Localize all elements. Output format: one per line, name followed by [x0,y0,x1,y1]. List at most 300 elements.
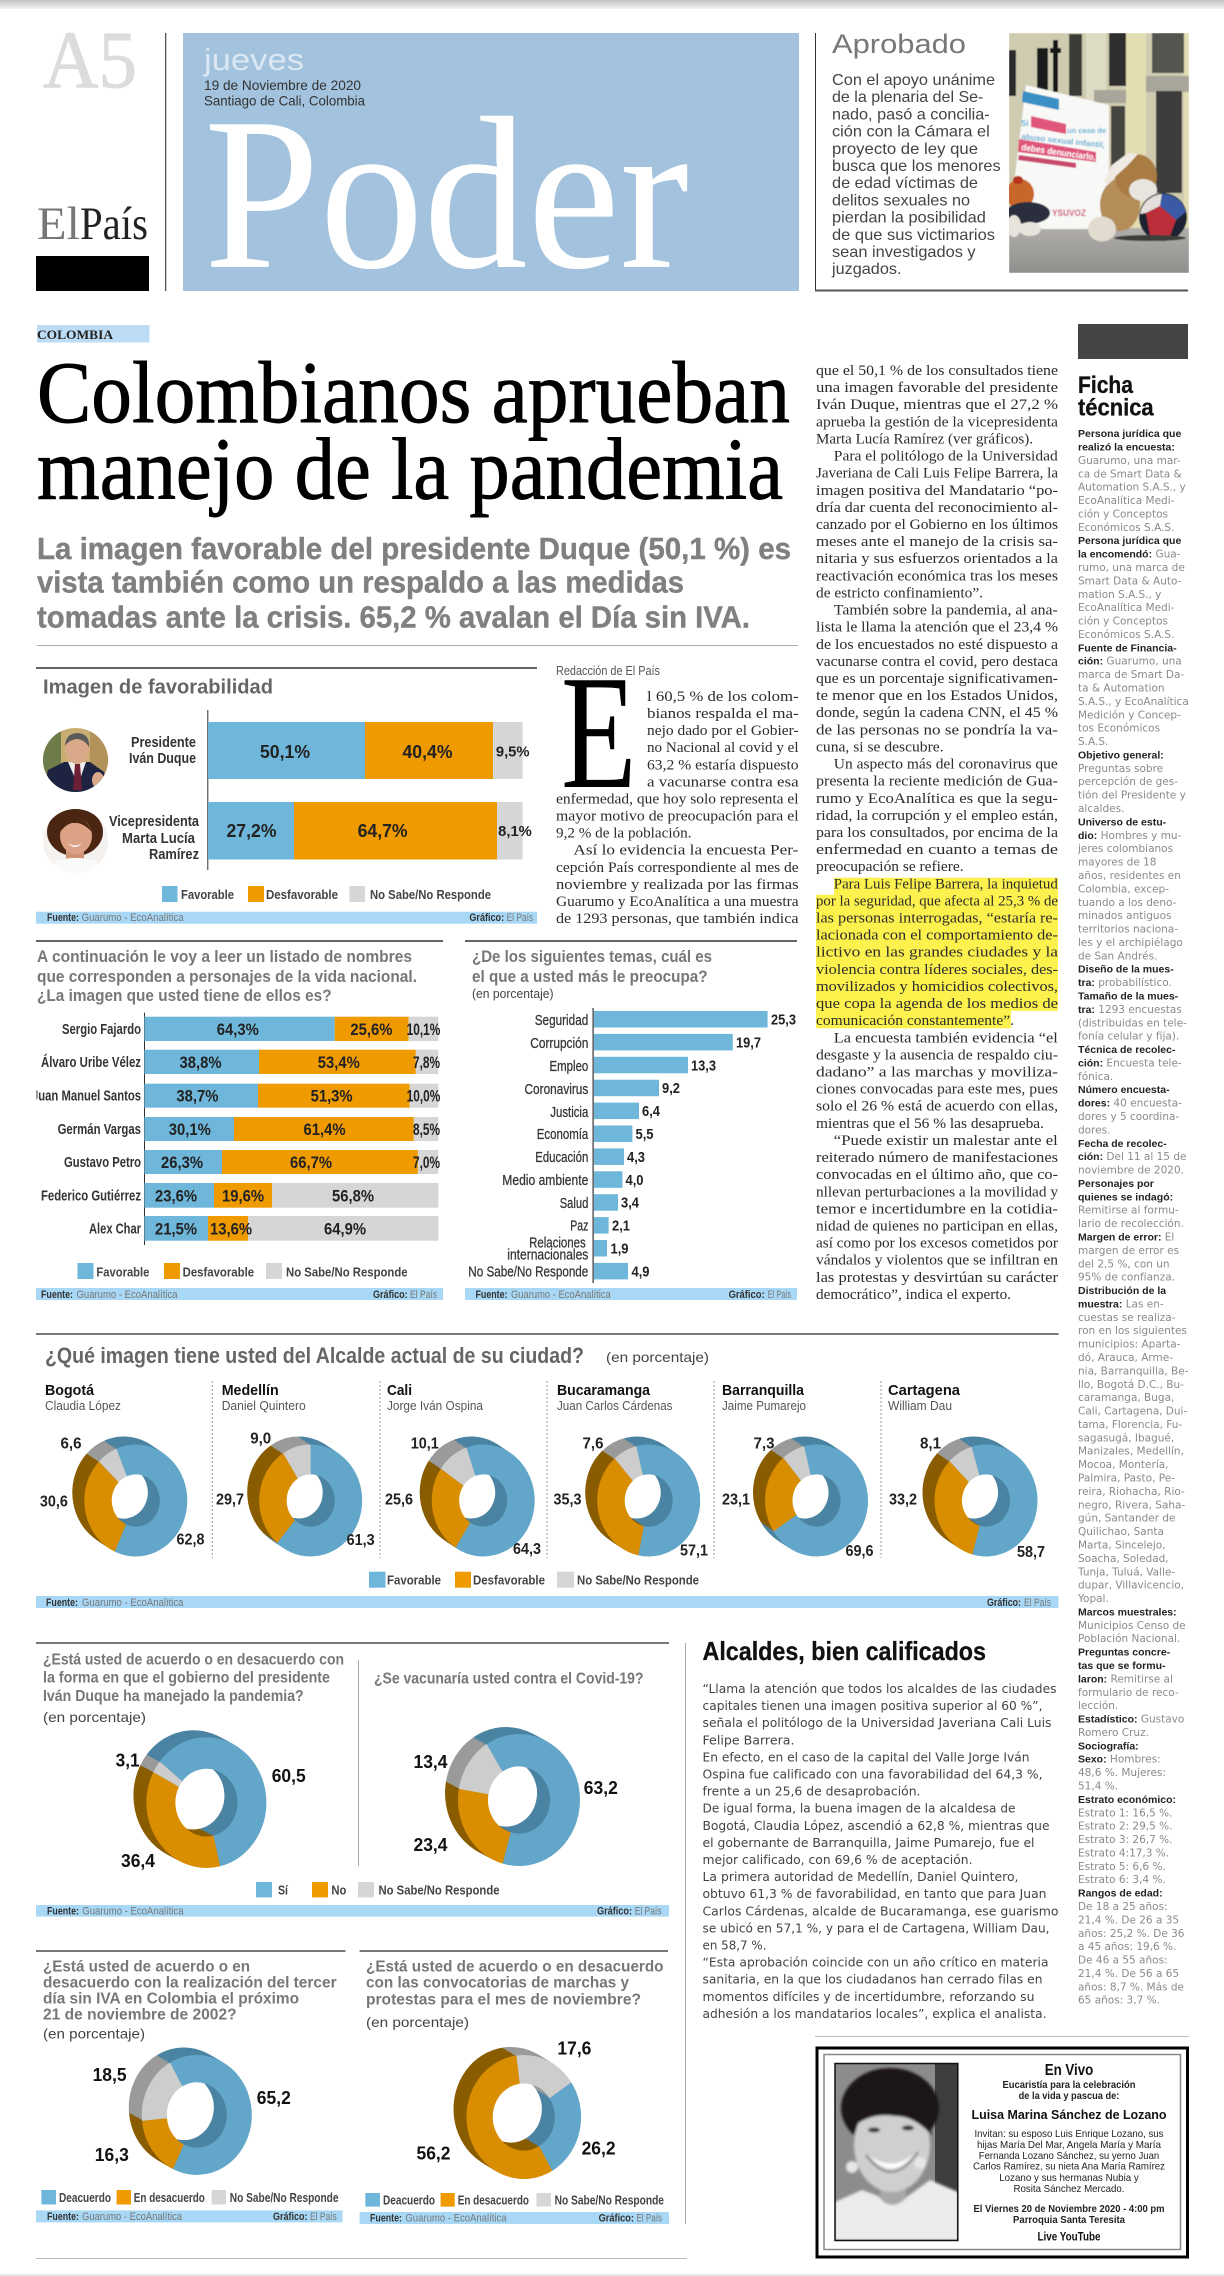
source bar: Guarumo - EcoAnalítica [82,2211,183,2223]
newspaper logo El País [37,198,148,250]
sidebar text: ca de Smart Data & [1078,468,1182,480]
chart heading: Imagen de favorabilidad [43,676,273,698]
drop cap: E [561,643,636,823]
sidebar text: Soacha, Soledad, [1078,1553,1169,1565]
stacked bars: 38,8% [180,1054,222,1072]
stacked bar chart: 8,1% [498,823,532,840]
bars: 19,7 [736,1034,761,1051]
article column 2: donde, según la cadena CNN, el 45 % [816,705,1058,721]
panel: día sin IVA donut [36,1950,346,2223]
sidebar text: 21,4 %. De 56 a 65 [1078,1968,1179,1980]
article column 2: ridad, la corrupción y el empleo están, [816,808,1058,824]
donut: Cartagena [888,1382,1045,1561]
source bar [36,2210,342,2223]
donut: Barranquilla [722,1382,874,1560]
row labels: Vicepresidenta [109,814,200,830]
bars: 1,9 [610,1240,628,1258]
sidebar text: años: 25,2 %. De 36 [1078,1928,1185,1940]
sidebar text: Diseño de la mues- [1078,964,1174,976]
sidebar text: tuando a los deno- [1078,897,1177,909]
source bar: Fuente: [47,912,79,924]
source bar: Fuente: [41,1289,73,1301]
legend [365,2192,664,2208]
sidebar text: Fuente de Financia- [1078,642,1177,654]
brief text: de la plenaria del Se- [832,89,983,106]
brief text: pierdan la posibilidad [832,210,986,227]
section tag: Colombia: COLOMBIA [37,327,114,342]
sidebar text: ta & Automation [1078,683,1165,695]
article column 2: nitaria y sus esfuerzos orientados a la [816,551,1058,567]
sidebar text: 21,4 %. De 26 a 35 [1078,1914,1179,1926]
donut: 16,3 [95,2145,129,2165]
article column 2: meses ante el manejo de la crisis sa- [816,534,1058,550]
donut: Medellín [216,1382,375,1558]
sidebar text: negro, Rivera, Saha- [1078,1499,1185,1511]
sidebar text: Fecha de recolec- [1078,1138,1167,1150]
sidebar text: Personajes por [1078,1178,1154,1190]
panel: alcaldes donut charts [36,1333,1058,1609]
legend: Desfavorable [473,1572,545,1588]
sidebar text: Estrato 5: 6,6 %. [1078,1861,1166,1873]
article column 2: reactivación económica tras los meses [816,568,1058,584]
legend: No Sabe/No Responde [370,887,491,902]
article text: La primera autoridad de Medellín, Daniel Quintero, [702,1869,1018,1884]
brief text: ción con la Cámara el [832,124,990,141]
donut: vacuna: 23,4 [414,1835,448,1855]
sidebar text: Estrato 2: 29,5 %. [1078,1821,1172,1833]
source bar: Guarumo - EcoAnalítica [82,1906,184,1918]
category labels: Educación [535,1150,588,1166]
sidebar text: Quilichao, Santa [1078,1526,1164,1538]
donut: vacuna: 13,4 [414,1752,448,1772]
names: Germán Vargas [58,1122,141,1138]
newspaper logo El País: País [80,198,148,250]
sidebar text: caramanga, Buga, [1078,1392,1174,1404]
brief heading: Aprobado [832,29,966,59]
headline: manejo de la pandemia [37,422,783,519]
article column 2: vacunarse contra el covid, pero destaca [816,654,1058,670]
sidebar text: dupar, Villavicencio, [1078,1580,1184,1592]
source bar: Gráfico: [373,1289,408,1301]
article column 2: las protestas y desvirtúan su carácter [816,1270,1058,1286]
panel: marchas y protestas donut [360,1950,669,2224]
article column 2: Para el politólogo de la Universidad [834,449,1058,465]
panel: temas horizontal bar chart [465,940,797,1301]
donut: Cartagena: 33,2 [889,1492,917,1508]
stacked bar chart [207,710,532,870]
page number A5: A5 [43,14,137,105]
article column 2: ciones convocadas para este mes, pues [816,1082,1058,1098]
article column 2: “Puede existir un malestar ante el [834,1133,1058,1149]
sidebar text: tos Económicos [1078,723,1160,735]
photo: teddy bear protest: YSUVOZ [1052,208,1086,218]
article column 1: a vacunarse contra esa [647,774,799,790]
question [43,1958,337,2041]
article text: En efecto, en el caso de la capital del Valle Jorge Iván [702,1749,1030,1764]
category labels: Seguridad [535,1013,588,1029]
sidebar text: dores y 5 coordina- [1078,1111,1179,1123]
article text: sanitaria, en la que los ciudadanos han cerrado filas en [702,1972,1042,1987]
names: Álvaro Uribe Vélez [41,1054,141,1071]
source bar: Guarumo - EcoAnalítica [76,1289,178,1301]
question: (en porcentaje) [366,2014,469,2030]
source bar: Guarumo - EcoAnalítica [82,912,184,924]
donut: Medellín: 29,7 [216,1492,244,1508]
article text: Ospina fue calificado con una favorabilidad del 64,3 %, [702,1766,1042,1782]
section name: Poder [204,74,689,315]
sidebar text: Rangos de edad: [1078,1888,1163,1900]
chart question: el que a usted más le preocupa? [472,968,708,986]
sidebar: Ficha técnica [1077,324,1192,2007]
sidebar text: años: 8,7 %. Más de [1078,1981,1184,1993]
source bar [36,1288,443,1301]
brief text: de edad víctimas de [832,175,978,192]
legend [162,886,491,902]
weekday: jueves [203,42,304,77]
article column 2: Marta Lucía Ramírez (ver gráficos). [816,431,1033,447]
sidebar text: Número encuesta- [1078,1084,1170,1096]
bars: 2,1 [612,1218,630,1235]
chart question [37,948,417,1005]
brief text: delitos sexuales no [832,192,970,209]
bars: 4,9 [632,1263,650,1280]
article text: en 58,7 %. [702,1938,766,1952]
stacked bars: 25,6% [350,1021,393,1039]
source bar: Gráfico: [729,1289,765,1301]
stacked bars: 51,3% [311,1088,353,1106]
legend: No Sabe/No Responde [555,2192,664,2208]
stacked bars: 61,4% [304,1121,346,1139]
donut: manejo pandemia: 3,1 [116,1750,140,1770]
donut: Cartagena: Cartagena [888,1382,961,1399]
photo: teddy bear protest: debes denunciarlo. [1021,142,1096,162]
notice text [972,2062,1167,2244]
section tag: Colombia [37,325,150,342]
brief text: proyecto de ley que [832,141,978,158]
sidebar text: percepción de ges- [1078,776,1178,788]
category labels: Empleo [550,1059,588,1075]
sidebar text: De 18 a 25 años: [1078,1901,1168,1913]
donut: Bucaramanga [554,1382,708,1560]
legend: No Sabe/No Responde [378,1882,500,1898]
sidebar text: cuestas se realiza- [1078,1312,1176,1324]
sidebar text: Sociografía: [1078,1740,1139,1752]
bars [592,1008,796,1283]
sidebar heading [1078,372,1154,422]
article column 1: cepción País correspondiente al mes de [556,860,799,876]
source bar: El País [636,2212,662,2224]
sidebar text: municipios: Aparta- [1078,1339,1181,1351]
source bar: Fuente: [46,1597,78,1609]
source bar [360,2212,669,2224]
subtitle [37,531,791,634]
donut: Bogotá: Claudia López [45,1398,121,1413]
sidebar text: Persona jurídica que [1078,535,1181,547]
article: Alcaldes, bien calificados [702,1636,1058,2021]
article column 2: de estricto confinamiento”. [816,585,983,601]
article heading: Alcaldes, bien calificados [702,1636,986,1666]
question [366,1958,664,2030]
donut: Cartagena: 58,7 [1017,1544,1045,1561]
article column 2: las personas interrogadas, “estaría re- [816,910,1058,926]
article text: “Llama la atención que todos los alcaldes de las ciudades [702,1681,1056,1696]
article column 2: dría dar cuenta del reconocimiento al- [816,500,1058,516]
stacked bars [144,1013,441,1245]
subtitle: vista también como un respaldo a las medidas [37,565,684,600]
sidebar text: Manizales, Medellín, [1078,1446,1184,1458]
source bar: El País [507,912,533,924]
sidebar text: margen de error es [1078,1245,1179,1257]
article column 2: que el 50,1 % de los consultados tiene [816,363,1058,379]
bars: 13,3 [691,1057,716,1074]
panel: personajes stacked bar chart [32,940,443,1301]
sidebar text: Smart Data & Auto- [1078,575,1182,587]
sidebar text: Tunja, Tuluá, Valle- [1077,1566,1175,1578]
brief text: Con el apoyo unánime [832,72,995,89]
portrait: Marta Lucía Ramírez [43,809,108,864]
sidebar text: Preguntas concre- [1078,1647,1171,1659]
source bar: Guarumo - EcoAnalítica [511,1289,611,1301]
article text [702,1681,1058,2021]
donut: Bucaramanga: 35,3 [554,1492,582,1508]
sidebar text: ción: Guarumo, una [1078,656,1182,668]
sidebar text: reira, Riohacha, Rio- [1078,1486,1185,1498]
portrait photo [835,2064,958,2240]
donut: Bucaramanga: 7,6 [582,1436,604,1452]
yellow highlight [816,878,1058,1028]
article column 2: solo el 26 % está de acuerdo con ellas, [816,1099,1058,1115]
legend: Deacuerdo [59,2190,111,2205]
sidebar text: de San Andrés. [1078,950,1157,962]
sidebar text: Sexo: Hombres: [1078,1754,1161,1766]
sidebar text: Romero Cruz. [1078,1727,1149,1739]
notice text: El Viernes 20 de Noviembre 2020 - 4:00 pm [974,2203,1164,2215]
panel: pandemia y vacuna donuts [36,1642,669,1918]
legend [256,1882,500,1898]
notice text: En Vivo [1045,2062,1093,2079]
article column 1: noviembre y realizada por las firmas [556,877,799,893]
sidebar text: alcaldes. [1078,803,1124,815]
sidebar text: rumo, una marca de [1078,562,1185,574]
article column 1: bianos respalda el ma- [647,706,799,722]
chart question: que corresponden a personajes de la vida nacional. [37,968,417,986]
category labels: internacionales [507,1247,588,1263]
donut: 56,2 [416,2144,450,2164]
sidebar text: Estrato 6: 3,4 %. [1078,1874,1166,1886]
row labels: Ramírez [149,847,199,863]
source bar: Gráfico: [469,912,504,924]
photo: teddy bear protest: abuso sexual infantil, [1021,132,1105,150]
bars: 9,2 [662,1080,680,1097]
stacked bars: 64,3% [217,1021,259,1039]
source bar: El País [1024,1597,1051,1609]
sidebar text: Tamaño de la mues- [1078,990,1179,1002]
sidebar text: 51,4 %. [1078,1780,1118,1792]
article column 1: 9,2 % de la población. [556,826,692,842]
stacked bars: 30,1% [169,1121,211,1139]
sidebar text: tas que se formu- [1078,1660,1166,1672]
donut [93,2045,291,2178]
donut: Bucaramanga: Bucaramanga [557,1382,651,1399]
stacked bars: 10,0% [407,1088,441,1106]
stacked bars: 38,7% [176,1088,219,1106]
category labels: Relaciones [529,1236,586,1252]
headline: Colombianos aprueban [37,345,790,442]
article column 2: lictivo en las grandes ciudades y la [816,945,1058,961]
bars: 6,4 [642,1103,661,1120]
dark header box [1078,324,1188,359]
sidebar text: Económicos S.A.S. [1078,522,1174,534]
source bar: Gráfico: [597,1906,632,1918]
chart question: A continuación le voy a leer un listado de nombres [37,948,412,966]
black box under logo [36,256,149,291]
question: manejo pandemia [43,1652,344,1725]
panel: Aprobado brief [815,29,1189,292]
source bar: El País [410,1289,437,1301]
category labels: Salud [560,1196,588,1212]
names: Juan Manuel Santos [32,1089,141,1105]
source bar [465,1288,797,1301]
notice text: Luisa Marina Sánchez de Lozano [972,2107,1167,2122]
sidebar text: laron: Remitirse al [1078,1673,1173,1685]
brief text: nado, pasó a concilia- [832,106,990,123]
stacked bars: 7,8% [413,1054,440,1072]
sidebar text: tama, Florencia, Fu- [1078,1419,1182,1431]
question: manejo pandemia: ¿Está usted de acuerdo o en desacuerdo con [43,1652,344,1669]
photo: teddy bear protest: un caso de [1067,126,1106,135]
notice text: Parroquia Santa Teresita [1013,2214,1125,2226]
sidebar text: ron en los siguientes [1078,1325,1187,1337]
article column 2: de las personas no se pondría la va- [816,722,1058,738]
photo: teddy bear protest [1006,33,1189,273]
article column 2: movilizados y homicidios colectivos, [816,979,1058,995]
article column 2: nllevan perturbaciones a la movilidad y [816,1184,1058,1200]
donut: 18,5 [93,2065,127,2085]
donut: Barranquilla: 7,3 [754,1436,775,1452]
names: Gustavo Petro [64,1155,141,1171]
sidebar text: Colombia, excep- [1078,883,1169,895]
sidebar text: ción: Encuesta tele- [1078,1057,1182,1069]
article text: adhesión a los mandatarios locales”, explica el analista. [702,2006,1046,2021]
article text: “Esta aprobación coincide con un año crítico en materia [702,1955,1048,1970]
sidebar text: lario de recolección. [1078,1218,1184,1230]
sidebar text: territorios naciona- [1078,924,1178,936]
sidebar text: lección. [1078,1700,1118,1712]
donut: manejo pandemia [116,1726,306,1872]
panel: Imagen de favorabilidad chart [36,667,537,924]
article text: capitales tienen una imagen positiva superior al 60 %”, [702,1698,1042,1713]
article column 2: nidad de quienes no participan en ellas, [816,1218,1058,1234]
chart question: ¿La imagen que usted tiene de ellos es? [37,987,332,1005]
sidebar text: fonía celular y fija). [1078,1031,1179,1043]
sidebar text: fónica. [1078,1071,1113,1083]
donut: vacuna [414,1724,618,1869]
stacked bar chart: 50,1% [260,742,310,762]
article column 2: de los encuestados no esté dispuesto a [816,637,1058,653]
donut: Cali: Jorge Iván Ospina [387,1398,484,1413]
sidebar text: 48,6 %. Mujeres: [1078,1767,1166,1779]
bars: 4,0 [626,1172,644,1189]
donut: manejo pandemia: 60,5 [272,1766,306,1786]
notice text: de la vida y pascua de: [1019,2090,1119,2102]
brief text: juzgados. [831,261,902,278]
article column 1: l 60,5 % de los colom- [647,689,799,705]
article text: Bogotá, Claudia López, ascendió a 62,8 %, mientras que [702,1818,1050,1833]
legend [41,2190,339,2205]
notice text: Fernanda Lozano Sánchez, su yerno Juan [979,2150,1159,2162]
sidebar text: noviembre de 2020. [1078,1165,1184,1177]
article column 2: vándalos y violentos que se infiltran en [816,1253,1059,1269]
article column 2: Javeriana de Cali Luis Felipe Barrera, la [816,466,1058,482]
stacked bars: 56,8% [332,1187,374,1205]
question: manejo pandemia: la forma en que el gobierno del presidente [43,1670,330,1687]
legend: Favorable [96,1264,149,1280]
source bar: Fuente: [47,1906,79,1918]
article column 2: una imagen favorable del presidente [816,380,1058,396]
names: Federico Gutiérrez [41,1188,141,1204]
donut: manejo pandemia: 36,4 [121,1851,155,1871]
category labels: No Sabe/No Responde [468,1265,588,1281]
sidebar text: ción y Conceptos [1078,508,1168,520]
article column 2: reiterado número de manifestaciones [816,1150,1058,1166]
sidebar text: EcoAnalítica Medi- [1078,495,1175,507]
sidebar text: mation S.A.S., y [1078,589,1161,601]
names: Sergio Fajardo [62,1022,141,1038]
donut: Cartagena: 8,1 [920,1436,941,1452]
article column 2: lacionada con el comportamiento de- [816,928,1058,944]
donut: Cali [385,1382,541,1558]
sidebar text: Técnica de recolec- [1078,1044,1176,1056]
source bar: Fuente: [370,2212,402,2224]
donut: Bucaramanga: 57,1 [680,1542,708,1560]
article column 1 [556,689,799,927]
donut: vacuna: 63,2 [584,1778,618,1798]
question: manejo pandemia: Iván Duque ha manejado la pandemia? [43,1688,304,1705]
sidebar text: EcoAnalítica Medi- [1078,602,1175,614]
stacked bars: 10,1% [407,1021,441,1039]
names [32,1022,141,1237]
stacked bars: 66,7% [290,1154,332,1172]
category labels: Paz [570,1219,588,1235]
article text: mejor calificado, con 69,6 % de aceptación. [702,1852,972,1867]
sidebar text: Objetivo general: [1078,749,1164,761]
sidebar text: Cali, Cartagena, Dui- [1078,1406,1187,1418]
stacked bars: 21,5% [155,1220,197,1238]
article column 2: presenta la reciente medición de Gua- [816,774,1058,790]
article column 2: dadano” a las marchas y moviliza- [816,1064,1058,1080]
donut: Bogotá: Bogotá [45,1382,95,1399]
date: 19 de Noviembre de 2020 [204,77,361,93]
place: Santiago de Cali, Colombia [204,93,365,109]
legend [369,1572,699,1588]
article column 1: Guarumo y EcoAnalítica a una muestra [556,894,799,910]
sidebar text: Estrato 3: 26,7 %. [1078,1834,1172,1846]
article text: De igual forma, la buena imagen de la alcaldesa de [702,1801,1016,1816]
sidebar text: muestra: Las en- [1078,1298,1164,1310]
question: desacuerdo con la realización del tercer [43,1974,337,1991]
article column 2: rumo y EcoAnalítica es que la segu- [816,791,1058,807]
source bar [36,912,537,924]
article column 1: nejo dado por el Gobier- [647,723,799,739]
article column 2: por la seguridad, que afecta al 25,3 % de [816,893,1058,909]
row labels: Iván Duque [129,751,196,767]
sidebar text: gún, Santander de [1078,1513,1176,1525]
donut: Bogotá: 30,6 [40,1494,68,1510]
stacked bars: 23,6% [155,1187,197,1205]
article column 2: para los consultados, por encima de la [816,825,1058,841]
sidebar text: Remitirse al formu- [1078,1205,1179,1217]
subtitle: tomadas ante la crisis. 65,2 % avalan el Día sin IVA. [37,600,750,634]
